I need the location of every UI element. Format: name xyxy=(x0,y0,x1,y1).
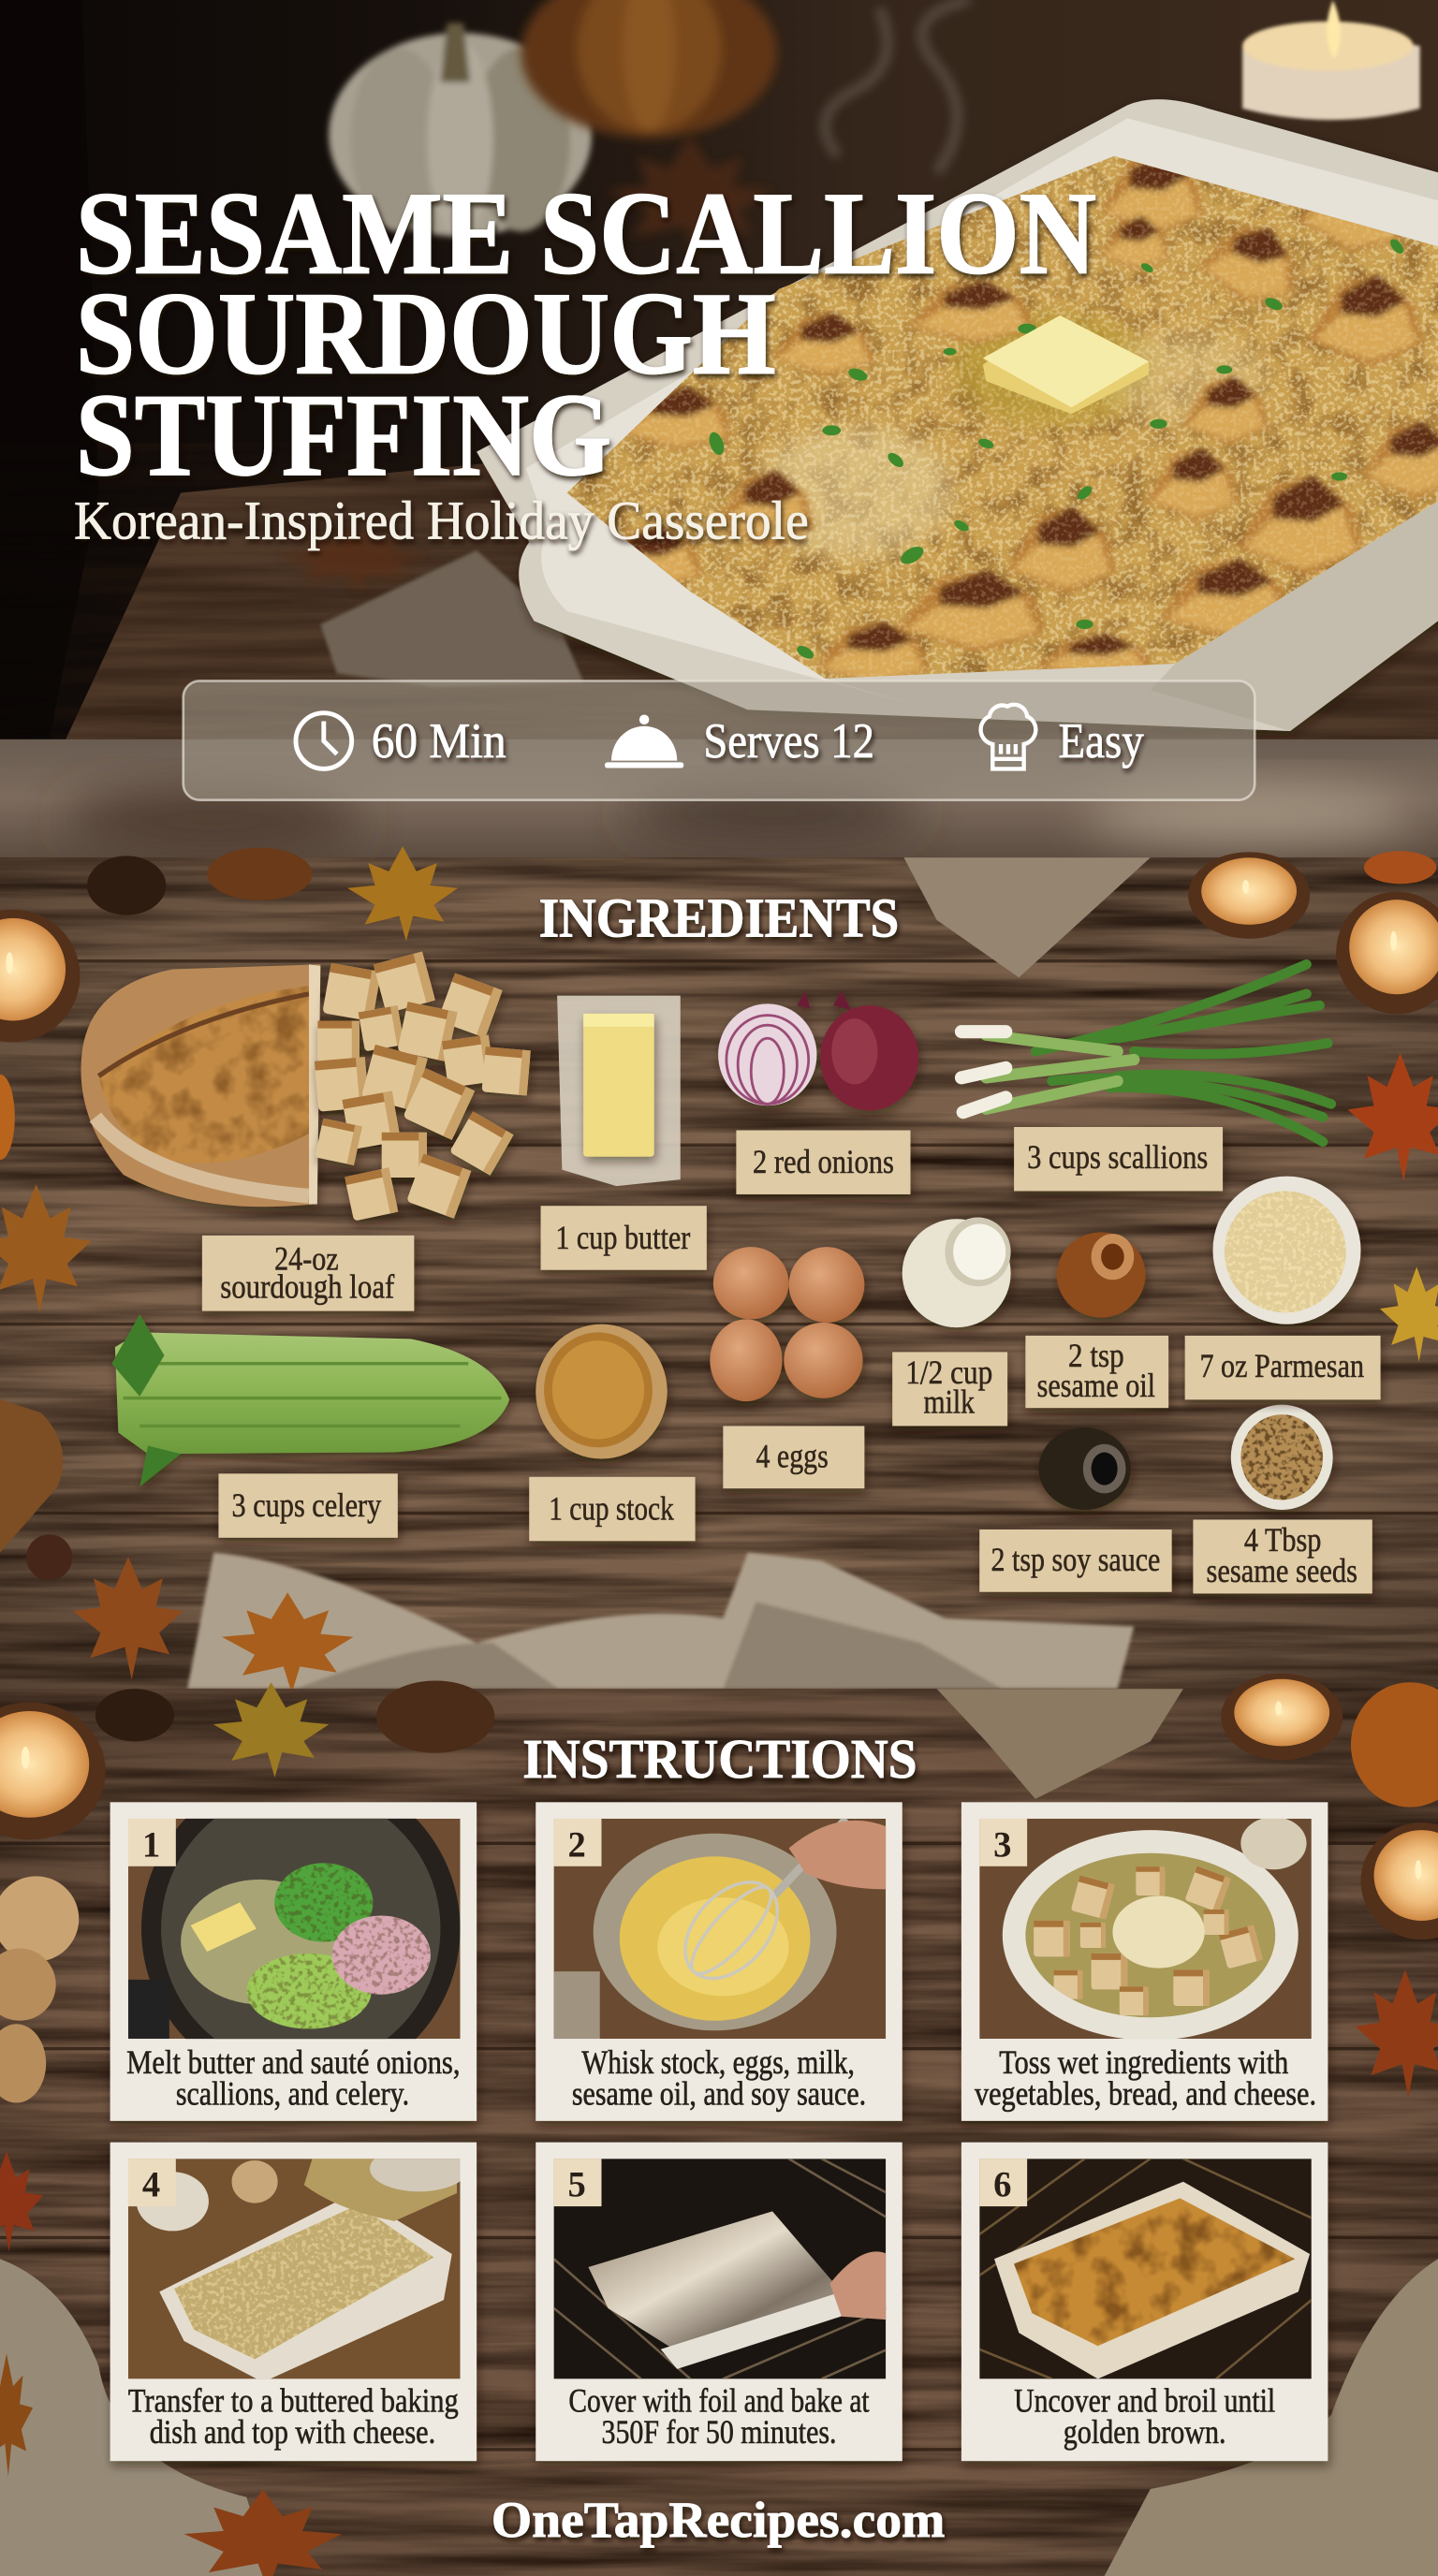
caption 1: scallions, and celery. xyxy=(176,2074,409,2112)
ingredient: milk jar xyxy=(902,1218,1011,1327)
label: red onions xyxy=(736,1131,911,1194)
card: step 2 xyxy=(536,1802,902,2121)
icon: lit candle xyxy=(1242,0,1420,120)
napkin xyxy=(187,1553,1134,1689)
card: step 1 xyxy=(110,1769,477,2121)
photo: broiled casserole xyxy=(979,2159,1312,2378)
steam xyxy=(825,0,970,172)
caption 6: golden brown. xyxy=(1064,2413,1226,2451)
label: milk: milk xyxy=(924,1383,975,1420)
linen napkin xyxy=(320,550,583,687)
label: sourdough loaf: 24-oz xyxy=(274,1240,339,1278)
title: STUFFING xyxy=(76,370,611,501)
panel: ingredients xyxy=(0,846,1438,1693)
card: step 4 xyxy=(110,2143,477,2461)
label: sesame seeds: sesame seeds xyxy=(1206,1552,1357,1589)
label: butter: 1 cup butter xyxy=(555,1219,690,1256)
title xyxy=(76,168,1096,501)
leaves on table xyxy=(280,136,774,593)
label: milk xyxy=(892,1352,1007,1426)
caption 6 xyxy=(1014,2381,1275,2451)
badge 5 xyxy=(554,2159,601,2206)
subtitle: Korean-Inspired Holiday Casserole xyxy=(74,490,809,551)
label: butter xyxy=(541,1206,707,1270)
label: stock: 1 cup stock xyxy=(549,1489,674,1527)
ingredient: stock jar xyxy=(536,1325,668,1459)
title: SOURDOUGH xyxy=(76,268,776,399)
ingredient: sourdough loaf xyxy=(81,964,320,1207)
icon: orange pumpkin xyxy=(521,0,777,138)
ingredient: celery xyxy=(111,1314,509,1486)
badge 6 xyxy=(979,2159,1027,2206)
badge 2: 2 xyxy=(567,1825,586,1865)
heading: ingredients: INGREDIENTS xyxy=(539,886,899,948)
panel: instructions xyxy=(0,1674,1438,2576)
caption 5: Cover with foil and bake at xyxy=(568,2381,870,2419)
label: sesame oil xyxy=(1025,1336,1168,1408)
label: milk: 1/2 cup xyxy=(905,1354,992,1391)
icon: chef hat xyxy=(981,705,1035,768)
card: step 6 xyxy=(961,2143,1328,2461)
label: sourdough loaf: sourdough loaf xyxy=(220,1268,394,1306)
photo: whisking xyxy=(554,1819,888,2039)
ingredient: red onions xyxy=(718,990,918,1110)
label: celery: 3 cups celery xyxy=(232,1486,381,1524)
ingredient: parmesan bowl xyxy=(1213,1177,1360,1325)
label: celery xyxy=(218,1473,398,1538)
photo: transfer to dish xyxy=(128,2145,468,2382)
caption 2 xyxy=(572,2043,866,2112)
photo: sautéing vegetables xyxy=(128,1769,461,2088)
badge 4: 4 xyxy=(142,2166,160,2205)
caption 1 xyxy=(126,2043,461,2112)
label: scallions: 3 cups scallions xyxy=(1027,1138,1208,1176)
baked stuffing xyxy=(526,148,1438,690)
label: parmesan xyxy=(1185,1336,1381,1399)
ingredient: bread cubes xyxy=(315,951,531,1222)
badge 1: 1 xyxy=(142,1825,160,1865)
photo: foil in oven xyxy=(554,2159,888,2378)
badge 3 xyxy=(979,1819,1027,1866)
caption 2: Whisk stock, eggs, milk, xyxy=(581,2043,855,2081)
badge 4 xyxy=(128,2159,176,2206)
ingredient: sesame oil xyxy=(1057,1232,1146,1318)
caption 4: dish and top with cheese. xyxy=(150,2413,435,2451)
badge 1 xyxy=(128,1819,176,1866)
caption 1: Melt butter and sauté onions, xyxy=(126,2043,461,2081)
title: SESAME SCALLION xyxy=(76,168,1096,299)
blurred band xyxy=(0,739,1438,857)
label: sourdough loaf xyxy=(202,1236,414,1311)
icon: white pumpkin xyxy=(329,23,592,238)
label: red onions: 2 red onions xyxy=(753,1143,894,1180)
caption 3: vegetables, bread, and cheese. xyxy=(975,2074,1316,2112)
icon: cloche xyxy=(605,714,683,768)
heading: instructions: INSTRUCTIONS xyxy=(522,1728,917,1790)
stat: time: 60 Min xyxy=(372,714,506,768)
badge 5: 5 xyxy=(567,2166,586,2205)
corner decorations xyxy=(0,846,1438,1679)
ingredient: sesame seeds xyxy=(1231,1405,1333,1510)
caption 4: Transfer to a buttered baking xyxy=(128,2381,459,2419)
caption 3 xyxy=(975,2043,1316,2112)
label: sesame oil: 2 tsp xyxy=(1068,1337,1124,1374)
card: step 5 xyxy=(536,2143,902,2461)
ingredient: soy sauce xyxy=(1038,1427,1131,1510)
label: soy sauce xyxy=(979,1530,1172,1592)
stat: difficulty: Easy xyxy=(1058,714,1144,768)
corner decorations xyxy=(0,1674,1438,2576)
casserole dish xyxy=(477,99,1438,731)
photo: tossing xyxy=(979,1817,1312,2041)
label: parmesan: 7 oz Parmesan xyxy=(1199,1347,1364,1384)
footer website: OneTapRecipes.com xyxy=(492,2492,945,2548)
icon: clock xyxy=(296,713,352,768)
caption 3: Toss wet ingredients with xyxy=(999,2043,1288,2081)
label: soy sauce: 2 tsp soy sauce xyxy=(991,1541,1160,1578)
stat: servings: Serves 12 xyxy=(703,714,874,768)
card: step 3 xyxy=(961,1802,1328,2121)
label: stock xyxy=(529,1477,696,1541)
caption 5 xyxy=(568,2381,870,2451)
badge 3: 3 xyxy=(993,1825,1011,1865)
leaf on napkin xyxy=(222,1592,353,1693)
label: sesame seeds xyxy=(1193,1519,1372,1593)
label: scallions xyxy=(1014,1127,1223,1191)
label: eggs: 4 eggs xyxy=(756,1437,829,1474)
label: eggs xyxy=(723,1426,864,1488)
wooden table xyxy=(54,444,1438,739)
caption 2: sesame oil, and soy sauce. xyxy=(572,2074,866,2112)
badge 6: 6 xyxy=(993,2166,1011,2205)
label: sesame seeds: 4 Tbsp xyxy=(1244,1521,1321,1559)
ingredient: eggs xyxy=(710,1247,864,1401)
ingredient: scallions xyxy=(961,964,1331,1142)
panel: hero photo xyxy=(0,0,1438,857)
caption 5: 350F for 50 minutes. xyxy=(601,2413,837,2451)
ingredient: butter xyxy=(557,996,681,1186)
label: sesame oil: sesame oil xyxy=(1037,1367,1155,1404)
caption 4 xyxy=(128,2381,459,2451)
butter pat xyxy=(983,315,1149,414)
stats bar xyxy=(183,681,1255,800)
caption 6: Uncover and broil until xyxy=(1014,2381,1275,2419)
badge 2 xyxy=(554,1819,601,1866)
